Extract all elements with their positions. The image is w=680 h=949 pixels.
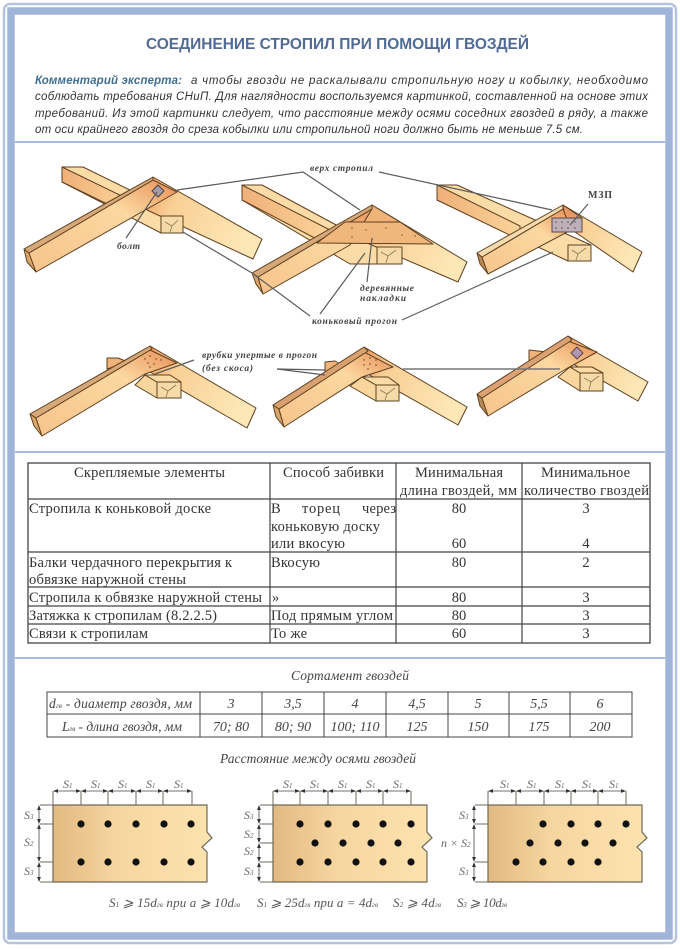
nail assortment table: 125 — [406, 720, 428, 735]
nail assortment table: 4 — [352, 697, 358, 712]
nail layout: two rows: S1 — [146, 777, 156, 791]
nail layout: three staggered rows: S1 — [393, 777, 402, 791]
nail assortment table: 6 — [596, 697, 604, 712]
spacing formulas: S3 ⩾ 10dгв — [457, 895, 507, 910]
nail assortment table: dгв - диаметр гвоздя, мм — [49, 696, 192, 711]
table body: Стропила к обвязке наружной стены — [29, 590, 262, 606]
nail assortment table: 80; 90 — [275, 720, 311, 735]
label: notches: (без скоса) — [202, 363, 253, 374]
table body: В — [271, 501, 281, 517]
table header: Способ забивки — [283, 465, 384, 481]
table body: обвязке наружной стены — [29, 572, 186, 588]
nail assortment table: 3 — [226, 697, 234, 712]
nail layout: two rows: S2 — [24, 835, 34, 849]
nail assortment table: 4,5 — [408, 697, 426, 712]
fastening table — [28, 463, 650, 643]
nail layout: two rows — [24, 777, 212, 882]
nail assortment table: 5 — [474, 697, 482, 712]
heading: distance between nail axes: Расстояние между осями гвоздей — [219, 751, 416, 766]
table body: или вкосую — [271, 536, 345, 552]
nail layout: diagonal staggered rows: S1 — [500, 777, 510, 791]
nail layout: two rows: S1 — [118, 777, 128, 791]
rafter diagram: notches without bevel, nailed — [30, 346, 256, 436]
table body: Связи к стропилам — [29, 626, 148, 642]
table body: Балки чердачного перекрытия к — [29, 555, 233, 571]
table header — [74, 465, 649, 499]
expert comment text: Комментарий эксперта: — [35, 75, 182, 87]
table body: 60 — [452, 536, 466, 552]
rafter diagram: notch with bolt — [477, 336, 648, 416]
expert comment text — [35, 75, 649, 136]
spacing formulas: S2 ⩾ 4dгв — [393, 895, 441, 910]
title: СОЕДИНЕНИЕ СТРОПИЛ ПРИ ПОМОЩИ ГВОЗДЕЙ — [146, 35, 529, 53]
table body: 3 — [582, 501, 590, 517]
nail layout: diagonal staggered rows: n × S2 — [441, 836, 471, 850]
table body: Затяжка к стропилам (8.2.2.5) — [29, 608, 217, 624]
table body: через — [362, 501, 396, 517]
nail assortment table: Lгв - длина гвоздя, мм — [61, 719, 182, 734]
table body: Стропила к коньковой доске — [29, 501, 211, 517]
spacing formulas: S1 ⩾ 25dгв при a = 4dгв — [257, 895, 378, 910]
table body: 3 — [582, 626, 590, 642]
table body: 60 — [452, 626, 466, 642]
label: wooden plates: деревянные — [360, 283, 415, 294]
label: notches: врубки упертые в прогон — [202, 350, 317, 361]
table body: 80 — [452, 590, 466, 606]
nail layout: two rows: S1 — [91, 777, 100, 791]
nail layout: diagonal staggered rows: S3 — [459, 864, 469, 878]
nail layout: three staggered rows: S3 — [244, 864, 254, 878]
spacing formulas: S1 ⩾ 15dгв при a ⩾ 10dгв — [109, 895, 240, 910]
nail assortment table: 70; 80 — [213, 720, 249, 735]
nail assortment table — [47, 692, 632, 737]
nail layout: two rows: S3 — [24, 864, 34, 878]
nail layout: three staggered rows: S2 — [244, 844, 254, 858]
nail layout: three staggered rows: S2 — [244, 827, 254, 841]
nail assortment table: 200 — [590, 720, 610, 735]
table body: 3 — [582, 608, 590, 624]
spacing formulas — [109, 895, 507, 910]
rafter diagram: notch with double board — [273, 347, 467, 427]
table body: 3 — [582, 590, 590, 606]
label: wooden plates — [360, 283, 415, 304]
table body: 80 — [452, 608, 466, 624]
label: bolt: болт — [117, 241, 140, 252]
label: notches — [202, 350, 317, 374]
nail assortment table: 100; 110 — [330, 720, 380, 735]
table body: коньковую доску — [271, 519, 381, 535]
nail assortment table: 5,5 — [530, 697, 548, 712]
nail layout: diagonal staggered rows: S1 — [609, 777, 618, 791]
expert comment text: требований. Из этой картинки следует, что расстояние между осями соседних гвоздей в ряду, а также — [35, 108, 648, 120]
expert comment text: соблюдать требования СНиП. Для наглядности воспользуемся картинкой, составленной на основе этих — [35, 91, 649, 103]
nail layout: diagonal staggered rows: S1 — [582, 777, 592, 791]
table body: Вкосую — [271, 555, 320, 571]
nail layout: two rows: S1 — [174, 777, 184, 791]
nail layout: three staggered rows: S3 — [244, 808, 254, 822]
rafter diagram: metal plate joint — [437, 185, 642, 274]
table body: То же — [271, 626, 307, 642]
table header: Скрепляемые элементы — [74, 465, 225, 481]
label: ridge purlin: коньковый прогон — [312, 316, 397, 327]
rafter diagram: bolted joint — [24, 167, 262, 272]
nail layout: two rows: S3 — [24, 808, 34, 822]
nail layout: three staggered rows: S1 — [338, 777, 348, 791]
nail assortment table: 3,5 — [283, 697, 302, 712]
nail layout: diagonal staggered rows — [441, 777, 647, 882]
expert comment text: а чтобы гвозди не раскалывали стропильную ногу и кобылку, необходимо — [191, 75, 649, 87]
table header: количество гвоздей — [524, 483, 649, 499]
table body: 4 — [582, 536, 590, 552]
nail layout: three staggered rows: S1 — [366, 777, 376, 791]
nail layout: three staggered rows — [244, 777, 432, 882]
nail layout: diagonal staggered rows: S1 — [555, 777, 564, 791]
expert comment text: от оси крайнего гвоздя до среза кобылки или стропильной ноги должно быть не меньше 7.5 см. — [35, 124, 583, 136]
table body: 80 — [452, 555, 466, 571]
label: wooden plates: накладки — [360, 293, 406, 304]
nail layout: three staggered rows: S1 — [283, 777, 292, 791]
nail layout: diagonal staggered rows: S1 — [527, 777, 536, 791]
nail assortment table: 150 — [468, 720, 488, 735]
label: metal plate: МЗП — [588, 190, 612, 201]
nail assortment table: 175 — [528, 720, 550, 735]
table body: 80 — [452, 501, 466, 517]
table body: торец — [302, 501, 340, 517]
heading: nail assortment: Сортамент гвоздей — [291, 668, 409, 683]
table body — [29, 501, 590, 642]
table header: Минимальная — [415, 465, 503, 481]
table body: » — [272, 590, 279, 606]
table body: 2 — [582, 555, 590, 571]
table body: Под прямым углом — [271, 608, 393, 624]
nail layout: diagonal staggered rows: S3 — [459, 808, 469, 822]
nail layout: three staggered rows: S1 — [310, 777, 320, 791]
table header: длина гвоздей, мм — [400, 483, 517, 499]
table header: Минимальное — [541, 465, 630, 481]
label: top of rafters: верх стропил — [310, 164, 373, 174]
rafter diagram: wooden gusset plates — [242, 185, 467, 294]
nail layout: two rows: S1 — [63, 777, 72, 791]
callout leaders — [126, 172, 588, 375]
